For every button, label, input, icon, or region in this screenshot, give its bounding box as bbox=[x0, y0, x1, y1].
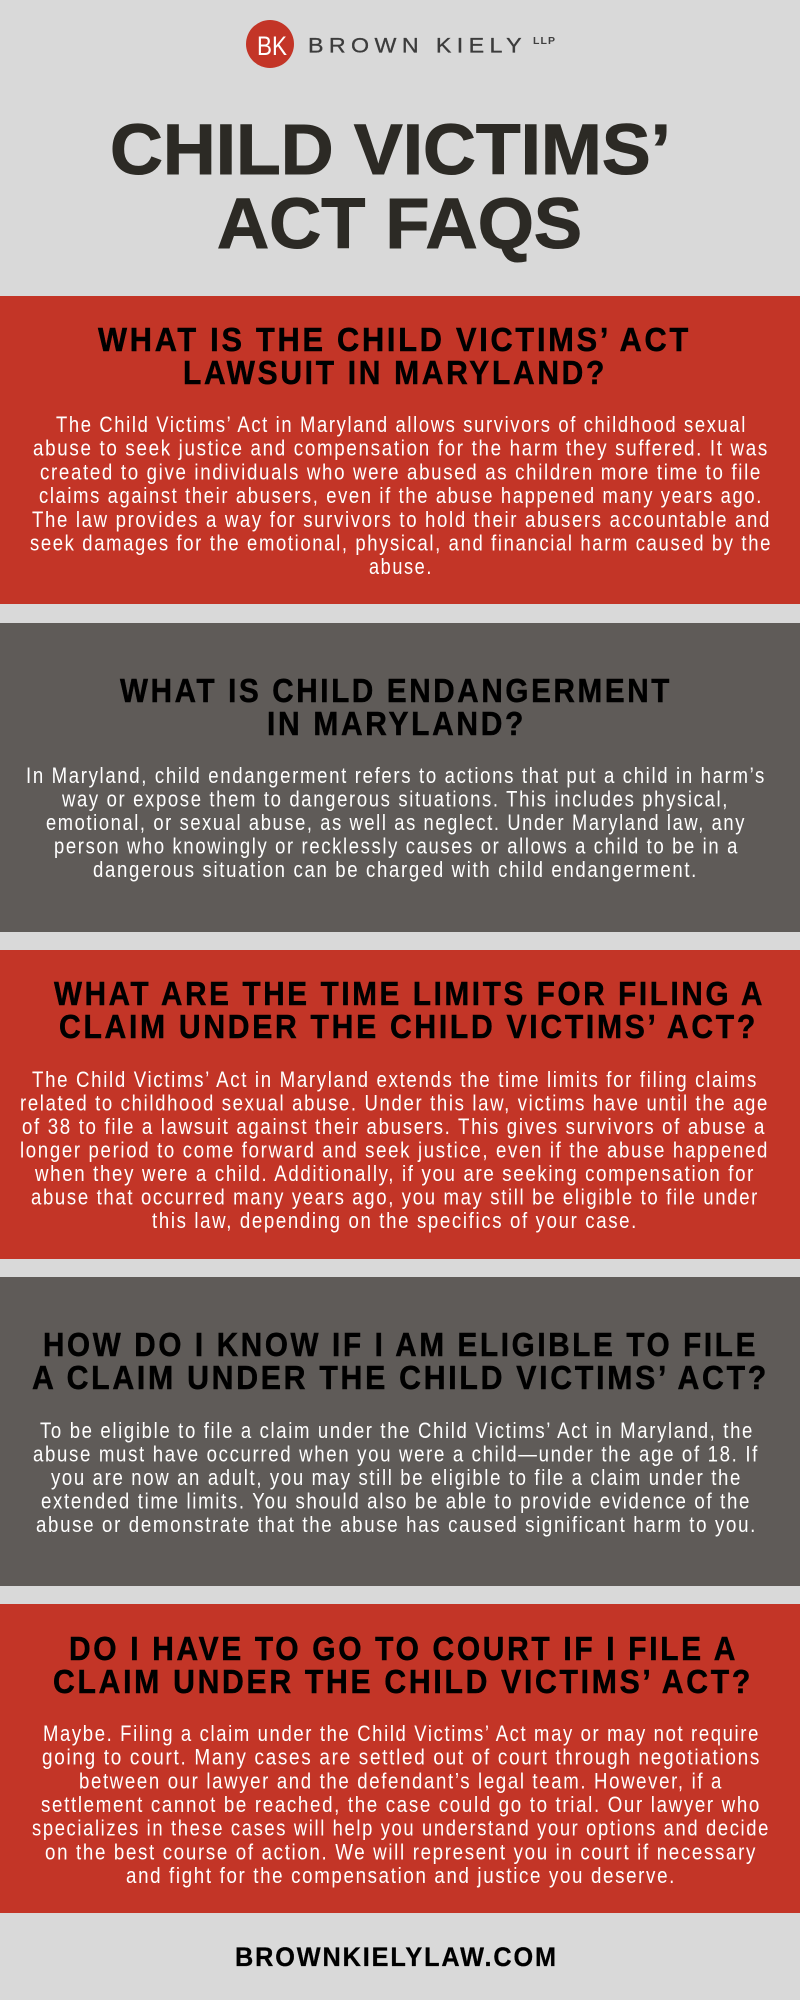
title bbox=[110, 111, 671, 264]
body text bbox=[30, 412, 772, 579]
icon: BK circle: BK bbox=[257, 31, 287, 61]
panel: time limits bbox=[0, 950, 800, 1259]
logo: Brown Kiely LLP bbox=[246, 20, 555, 68]
heading: WHAT IS THE CHILD VICTIMS’ ACT bbox=[98, 322, 691, 359]
heading bbox=[54, 976, 765, 1046]
heading: IN MARYLAND? bbox=[267, 706, 526, 743]
title: ACT FAQS bbox=[217, 185, 582, 264]
heading: DO I HAVE TO GO TO COURT IF I FILE A bbox=[69, 1631, 738, 1668]
heading bbox=[120, 673, 672, 743]
title: CHILD VICTIMS’ bbox=[110, 111, 671, 190]
body text bbox=[32, 1721, 770, 1888]
body text: and fight for the compensation and justice you deserve. bbox=[126, 1863, 676, 1888]
body text bbox=[20, 1067, 769, 1233]
heading bbox=[32, 1327, 769, 1397]
panel: what is child endangerment bbox=[0, 623, 800, 932]
heading bbox=[98, 322, 691, 392]
logo suffix: LLP bbox=[533, 35, 555, 47]
heading: LAWSUIT IN MARYLAND? bbox=[183, 355, 607, 392]
icon: BK circle bbox=[246, 20, 294, 68]
panel: what is the Child Victims' Act lawsuit bbox=[0, 296, 800, 604]
body text: abuse. bbox=[369, 554, 433, 579]
body text bbox=[26, 763, 766, 882]
heading: WHAT IS CHILD ENDANGERMENT bbox=[120, 673, 672, 710]
body text bbox=[33, 1418, 759, 1537]
panel: eligibility bbox=[0, 1277, 800, 1586]
panel: going to court bbox=[0, 1604, 800, 1913]
footer: website: BROWNKIELYLAW.COM bbox=[235, 1942, 558, 1972]
body text: this law, depending on the specifics of your case. bbox=[152, 1208, 638, 1233]
heading bbox=[53, 1631, 753, 1701]
logo wordmark: BROWN KIELY bbox=[308, 34, 527, 58]
